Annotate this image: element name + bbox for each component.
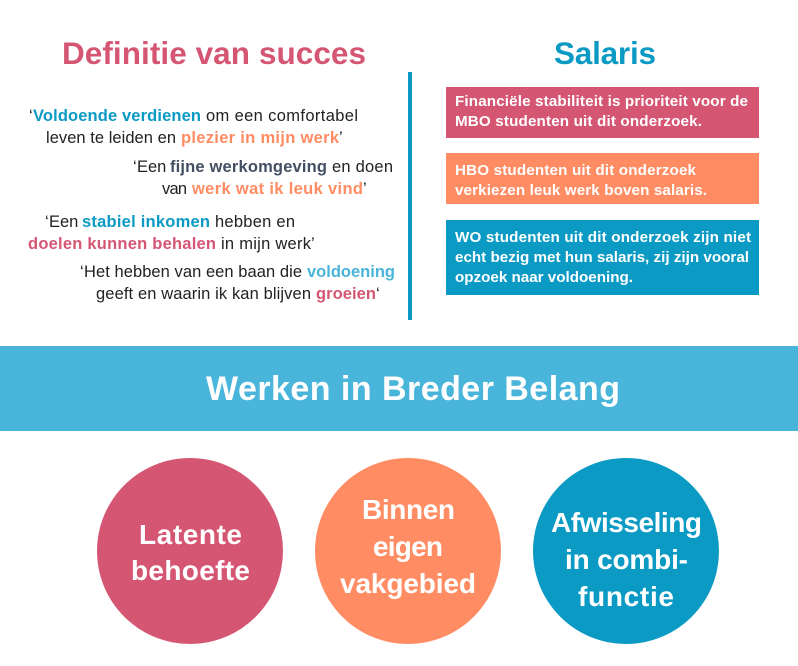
panel: MBO salaris: Financiële stabiliteit is prioriteit voor de	[455, 93, 748, 110]
quote 2: van	[162, 180, 187, 198]
panel: HBO salaris: verkiezen leuk werk boven salaris.	[455, 182, 707, 199]
banner: Werken in Breder Belang: Werken in Breder Belang	[206, 370, 620, 408]
quote 3: stabiel inkomen	[82, 213, 210, 231]
panel: HBO salaris: HBO studenten uit dit onderzoek	[455, 162, 697, 179]
quote 4: groeien	[316, 285, 376, 303]
heading: Definitie van succes: Definitie van succes	[62, 35, 366, 71]
quote 2: Een	[137, 158, 166, 176]
quote 4	[80, 263, 395, 303]
quote 2: ’	[363, 180, 367, 198]
quote 3	[28, 213, 315, 253]
quote 3: Een	[49, 213, 78, 231]
quote 3: hebben en	[215, 213, 295, 231]
panel: WO salaris: echt bezig met hun salaris, zij zijn vooral	[455, 249, 749, 266]
panel: MBO salaris	[446, 87, 759, 138]
quote 2: fijne werkomgeving	[170, 158, 327, 176]
quote 1: plezier in mijn werk	[181, 129, 340, 147]
quote 4: ‘	[80, 263, 84, 281]
quote 1: om een comfortabel	[206, 107, 358, 125]
quote 2: en doen	[332, 158, 393, 176]
quote 4: geeft en waarin ik kan blijven	[96, 285, 311, 303]
quote 2	[133, 158, 393, 198]
circle: Afwisseling in combi-functie: in combi-	[565, 544, 688, 575]
panel: WO salaris	[446, 220, 759, 295]
circle: Latente behoefte: Latente	[139, 519, 242, 550]
quote 2: ‘	[133, 158, 137, 176]
panel: HBO salaris	[446, 153, 759, 204]
quote 2: werk wat ik leuk vind	[191, 180, 363, 198]
circle: Latente behoefte	[97, 458, 283, 644]
quotes block	[28, 107, 395, 303]
circle: Binnen eigen vakgebied: eigen	[373, 531, 443, 562]
quote 1: ’	[339, 129, 343, 147]
circle: Afwisseling in combi-functie: Afwisseling	[551, 507, 702, 538]
circle: Binnen eigen vakgebied: Binnen	[362, 494, 455, 525]
panel: WO salaris: WO studenten uit dit onderzoek zijn niet	[455, 229, 751, 246]
quote 3: in mijn werk	[221, 235, 312, 253]
circle: Afwisseling in combi-functie: functie	[578, 581, 674, 612]
circle: Afwisseling in combi-functie	[533, 458, 719, 644]
quote 3: doelen kunnen behalen	[28, 235, 216, 253]
panel: MBO salaris: MBO studenten uit dit onderzoek.	[455, 113, 702, 130]
quote 1	[29, 107, 358, 147]
circle: Latente behoefte: behoefte	[131, 555, 250, 586]
quote 4: voldoening	[307, 263, 395, 281]
quote 1: ‘	[29, 107, 33, 125]
banner: Werken in Breder Belang	[0, 346, 798, 431]
quote 4: Het hebben van een baan die	[84, 263, 302, 281]
circle: Binnen eigen vakgebied: vakgebied	[340, 568, 476, 599]
heading: Salaris: Salaris	[554, 35, 656, 71]
quote 3: ‘	[45, 213, 49, 231]
vertical divider	[408, 72, 412, 320]
quote 4: ‘	[376, 285, 380, 303]
quote 3: ’	[311, 235, 315, 253]
circle: Binnen eigen vakgebied	[315, 458, 501, 644]
panel: WO salaris: opzoek naar voldoening.	[455, 269, 633, 286]
quote 1: Voldoende verdienen	[33, 107, 201, 125]
quote 1: leven te leiden en	[46, 129, 176, 147]
